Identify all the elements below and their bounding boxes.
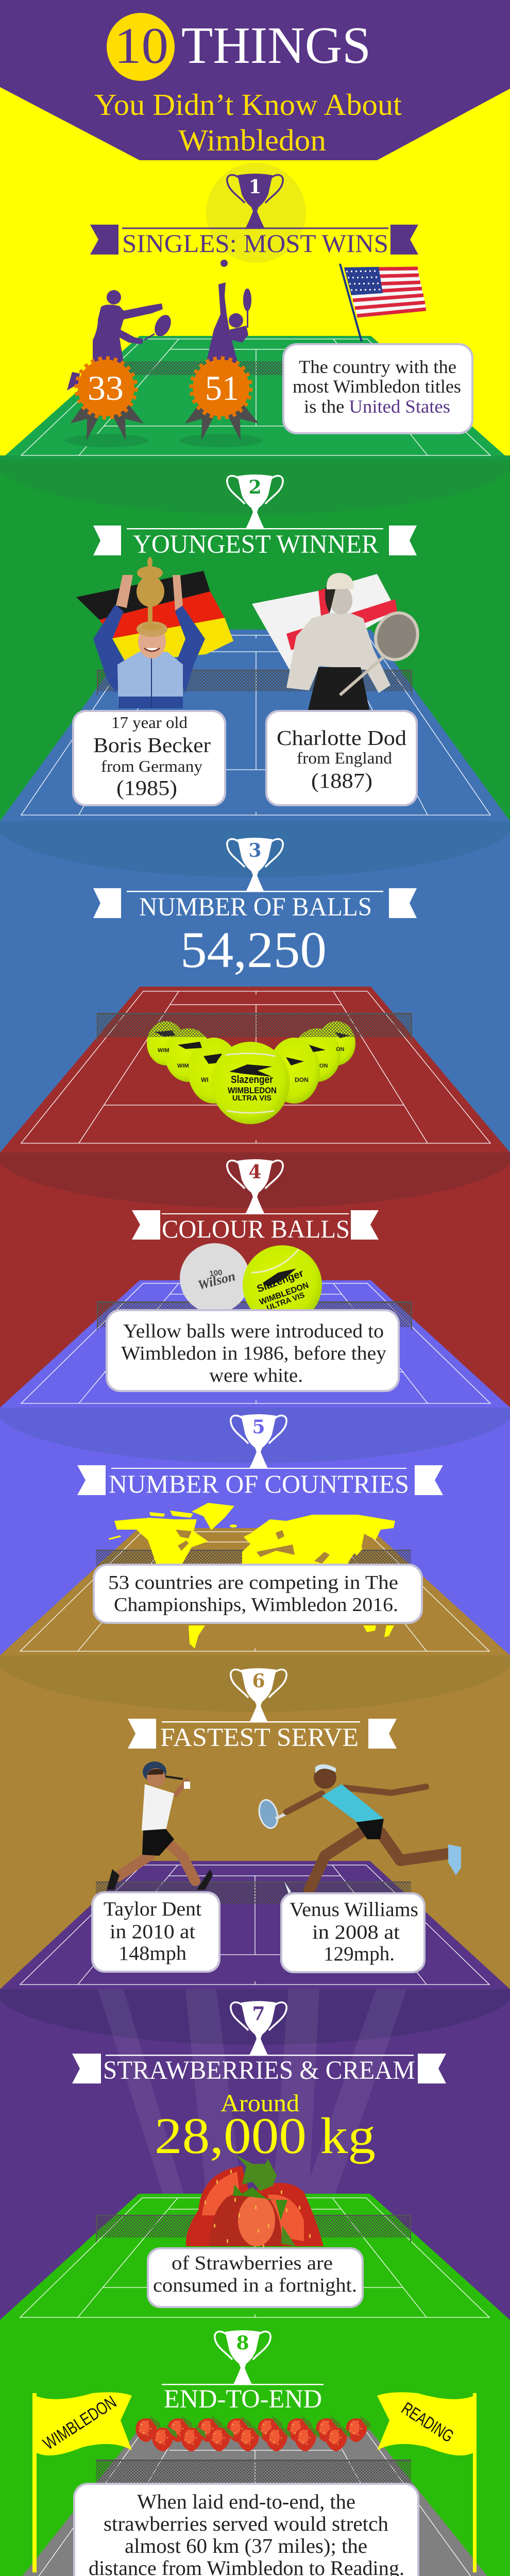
callout: country with most titles: most Wimbledon titles (293, 376, 461, 397)
callout: Venus Williams: 129mph. (324, 1943, 395, 1965)
decorative light beams (98, 1989, 407, 2200)
callout: end to end: almost 60 km (37 miles); the (125, 2534, 367, 2557)
photo: Taylor Dent (107, 1761, 213, 1890)
icon: trophy 7 (231, 2001, 286, 2055)
callout: of strawberries (147, 2247, 364, 2308)
callout: of strawberries: of Strawberries are (172, 2252, 333, 2274)
icon: trophy 4 (227, 1159, 283, 1213)
icon: trophy 1 (227, 174, 283, 228)
callout: yellow balls: Wimbledon in 1986, before they (121, 1343, 386, 1364)
callout: Venus Williams: in 2008 at (312, 1921, 400, 1943)
icon: trophy 8 (215, 2330, 270, 2384)
tennis balls pyramid: WIM (158, 1047, 169, 1054)
court: purple (0, 1861, 510, 1989)
panel: section 8 end-to-end (0, 2330, 510, 2576)
heading ribbon: strawberries and cream: STRAWBERRIES & CREAM (103, 2056, 415, 2085)
panel: youngest winner background (0, 460, 510, 821)
decorative arc section 4 (0, 1153, 510, 1208)
callout: Venus Williams (280, 1892, 426, 1973)
tennis balls pyramid: ON (336, 1046, 345, 1053)
icon: trophy 3: 3 (248, 840, 262, 861)
court: red (0, 987, 510, 1153)
icon: trophy 2: 2 (248, 477, 262, 498)
big number: 54,250: 54,250 (180, 921, 327, 978)
panel: number of balls background (0, 821, 510, 1153)
icon: trophy 2 (227, 474, 283, 529)
callout: end to end: When laid end-to-end, the (137, 2490, 355, 2513)
callout: end to end (73, 2483, 419, 2576)
icon: trophy 3 (227, 838, 283, 892)
flag: Reading (377, 2392, 477, 2572)
callout: Taylor Dent (91, 1891, 220, 1973)
callout: Boris Becker: Boris Becker (93, 733, 211, 757)
icon: US flag (340, 264, 427, 342)
callout: Boris Becker (72, 710, 226, 806)
heading ribbon: number of balls: NUMBER OF BALLS (139, 893, 372, 922)
panel: colour balls background (0, 1153, 510, 1408)
callout: Taylor Dent: in 2010 at (110, 1921, 195, 1943)
icon: trophy 7: 7 (252, 2003, 265, 2025)
icon: ball (220, 260, 228, 267)
decorative arc section 2 (0, 460, 510, 514)
yellow Slazenger ball: ULTRA VIS (265, 1291, 306, 1313)
flag: Reading: READING (398, 2399, 457, 2446)
court: green (0, 336, 510, 460)
panel: section 5 number of countries (0, 1414, 510, 1655)
callout: Taylor Dent: Taylor Dent (104, 1898, 201, 1920)
callout: yellow balls: Yellow balls were introduced to (123, 1320, 384, 1342)
icon: trophy 8: 8 (236, 2332, 249, 2354)
title badge: 10 (107, 13, 175, 81)
yellow Slazenger ball: WIMBLEDON (258, 1281, 310, 1307)
badge: 51 (179, 359, 263, 447)
panel: title banner (0, 0, 510, 160)
heading ribbon: singles most wins (90, 225, 418, 258)
silhouette: female player (206, 282, 251, 363)
backdrop circle (206, 163, 306, 263)
white Wilson ball (180, 1243, 250, 1313)
white Wilson ball: Wilson (196, 1268, 237, 1293)
icon: trophy 5 (231, 1414, 286, 1468)
callout: country with most titles: is the United States (304, 396, 450, 417)
callout: Taylor Dent: 148mph (118, 1942, 186, 1964)
callout: Boris Becker: from Germany (101, 757, 202, 775)
heading ribbon: fastest serve (128, 1719, 397, 1752)
decorative arc section 5 (0, 1408, 510, 1463)
callout: Boris Becker: 17 year old (111, 713, 188, 732)
title: THINGS: THINGS (181, 16, 371, 75)
label: Around: Around (220, 2090, 299, 2117)
callout: Charlotte Dod (265, 710, 418, 806)
callout: country with most titles (282, 343, 473, 434)
tennis balls pyramid: WIM (177, 1063, 189, 1069)
tennis balls pyramid: DON (295, 1076, 309, 1083)
strawberries row (135, 2415, 371, 2451)
tennis balls pyramid: ULTRA VIS (232, 1094, 271, 1103)
panel: section 6 fastest serve (0, 1668, 510, 1989)
panel: section 2 youngest winner (0, 474, 510, 821)
panel: header and singles section background (0, 0, 510, 460)
heading ribbon: colour balls: COLOUR BALLS (162, 1214, 350, 1243)
white Wilson ball: 100 (209, 1268, 223, 1278)
icon: trophy 1: 1 (248, 176, 262, 198)
decorative arc section 7 (0, 1989, 510, 2045)
title: Wimbledon: Wimbledon (178, 123, 326, 157)
silhouette: male player (67, 290, 174, 391)
tennis balls pyramid (147, 1021, 355, 1124)
callout: end to end: strawberries served would stretch (104, 2512, 388, 2535)
panel: fastest serve background (0, 1655, 510, 1989)
callout: Charlotte Dod: Charlotte Dod (277, 726, 406, 750)
callout: country with most titles: The country with the (299, 357, 456, 377)
icon: trophy 6: 6 (252, 1670, 265, 1692)
heading ribbon: number of balls (93, 888, 417, 922)
callout: yellow balls (106, 1309, 400, 1392)
decorative arc section 3 (0, 821, 510, 877)
callout: 53 countries: 53 countries are competing in The (108, 1572, 398, 1594)
net (97, 1013, 412, 1042)
flag: Wimbledon (32, 2392, 132, 2572)
icon: trophy 5: 5 (252, 1416, 265, 1438)
court: bright green (0, 2194, 510, 2320)
panel: section 4 colour balls (0, 1159, 510, 1408)
panel: number of countries background (0, 1408, 510, 1655)
callout: 53 countries: Championships, Wimbledon 2016. (114, 1594, 398, 1616)
heading ribbon: fastest serve: FASTEST SERVE (160, 1723, 359, 1752)
tennis balls pyramid: Slazenger (231, 1074, 273, 1086)
badge: 51: 51 (205, 368, 239, 408)
title: You Didn't Know About: You Didn’t Know About (94, 88, 402, 122)
callout: of strawberries: consumed in a fortnight. (153, 2275, 357, 2296)
callout: 53 countries (93, 1564, 423, 1624)
photo: Venus Williams (256, 1764, 461, 1893)
world map (109, 1503, 395, 1649)
tennis balls pyramid: ON (319, 1063, 328, 1069)
panel: section 1 singles most wins (0, 163, 510, 460)
heading ribbon: youngest winner (93, 526, 417, 559)
heading ribbon: colour balls (132, 1210, 379, 1243)
flag: Wimbledon: WIMBLEDON (40, 2392, 120, 2454)
tennis balls pyramid: WI (201, 1076, 209, 1083)
panel: section 3 number of balls (0, 838, 510, 1153)
panel: section 7 strawberries and cream (0, 2001, 510, 2320)
icon: trophy 6 (231, 1668, 286, 1722)
callout: yellow balls: were white. (209, 1365, 303, 1386)
heading ribbon: singles most wins: SINGLES: MOST WINS (122, 229, 388, 258)
court: grey (0, 2430, 510, 2576)
heading ribbon: number of countries: NUMBER OF COUNTRIES (109, 1469, 409, 1498)
yellow Slazenger ball (243, 1245, 322, 1325)
callout: Boris Becker: (1985) (116, 776, 177, 800)
heading: end-to-end: END-TO-END (164, 2385, 322, 2414)
decorative arc section 6 (0, 1655, 510, 1712)
panel: end-to-end background (0, 2320, 510, 2576)
icon: trophy 4: 4 (248, 1161, 262, 1183)
big number: 28,000 kg: 28,000 kg (155, 2107, 376, 2164)
photo: Charlotte Dod with English flag (252, 573, 424, 712)
badge: 33: 33 (88, 368, 124, 408)
panel: strawberries background (0, 1989, 510, 2320)
court: blue (0, 630, 510, 821)
photo: Boris Becker with German flag (76, 557, 233, 708)
callout: Charlotte Dod: from England (297, 749, 392, 767)
yellow Slazenger ball: Slazenger (256, 1267, 305, 1295)
tennis balls pyramid: WIMBLEDON (228, 1086, 277, 1095)
title badge: 10: 10 (114, 17, 168, 74)
illustration: strawberries (186, 2155, 324, 2246)
badge: 33 (65, 359, 148, 447)
heading ribbon: youngest winner: YOUNGEST WINNER (133, 530, 379, 559)
callout: Venus Williams: Venus Williams (290, 1899, 418, 1921)
court: violet (0, 1280, 510, 1408)
callout: Charlotte Dod: (1887) (311, 769, 372, 792)
court: gold (0, 1528, 510, 1655)
